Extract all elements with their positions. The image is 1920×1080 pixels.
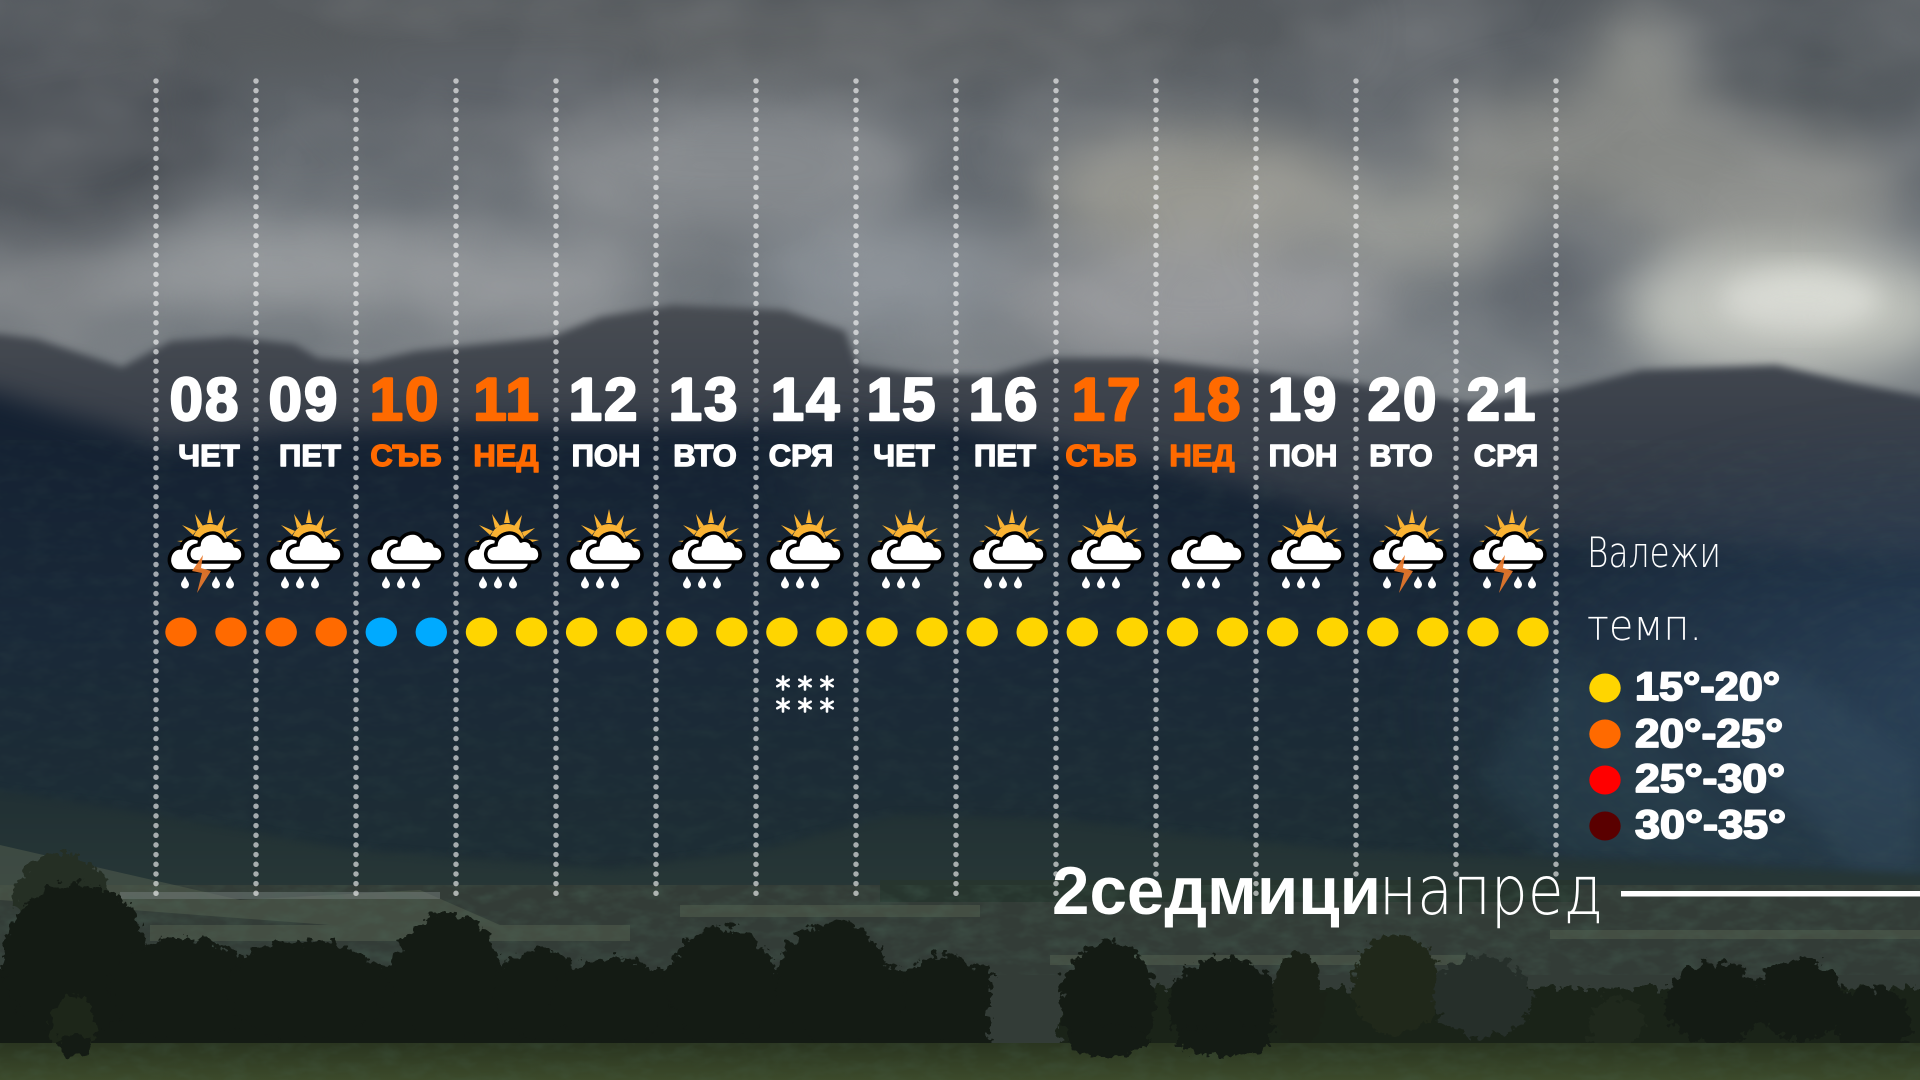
weekday: ПОН	[1269, 438, 1337, 473]
grass foreground	[0, 1043, 1920, 1080]
legend item 20-25	[1589, 712, 1783, 756]
weekday: СЪБ	[370, 438, 442, 473]
date: 18	[1172, 366, 1242, 433]
weekday: ВТО	[673, 438, 737, 473]
temperature dots	[866, 618, 948, 646]
icon: sun, clouds, rain and lightning	[169, 509, 243, 593]
date: 08	[170, 366, 240, 433]
column: 15 Thursday	[866, 366, 948, 646]
temperature dots	[165, 618, 247, 646]
weekday: ПЕТ	[279, 438, 341, 473]
column: 09 Friday	[266, 366, 347, 646]
icon: snow asterisks	[777, 676, 833, 712]
weekday: СЪБ	[1065, 438, 1137, 473]
temperature dots	[1067, 618, 1148, 646]
icon: clouds and rain	[1169, 533, 1243, 588]
date: 09	[269, 366, 339, 433]
weekday: ЧЕТ	[873, 438, 935, 473]
right side lit slope	[1000, 400, 1920, 960]
weekday: СРЯ	[769, 438, 833, 473]
dark cloud band on the ridge	[0, 305, 1920, 620]
date: 16	[969, 366, 1039, 433]
weekday: НЕД	[1169, 438, 1235, 473]
column: 12 Monday	[566, 366, 647, 646]
icon: sun, clouds, rain	[568, 509, 642, 588]
icon: sun, clouds, rain and lightning	[1371, 509, 1445, 593]
weekday: ЧЕТ	[178, 438, 240, 473]
column: 14 Wednesday	[766, 366, 848, 712]
label: precipitation: Валежи	[1587, 528, 1721, 577]
date: 21	[1467, 366, 1537, 433]
column: 08 Thursday	[165, 366, 247, 646]
temperature dots	[966, 618, 1048, 646]
title light part: напред	[1379, 852, 1603, 931]
column: 17 Saturday	[1065, 366, 1148, 646]
title bold part: 2седмици	[1052, 853, 1381, 929]
date: 19	[1268, 366, 1338, 433]
icon: sun, clouds, rain	[768, 509, 842, 588]
date: 13	[669, 366, 739, 433]
legend item 15-20: 15°-20°	[1635, 665, 1780, 709]
column: 11 Sunday	[466, 366, 547, 646]
temperature dots	[566, 618, 647, 646]
sky	[0, 0, 1920, 560]
icon: sun, clouds, rain	[268, 509, 342, 588]
legend item 25-30: 25°-30°	[1635, 757, 1785, 801]
legend item 20-25: 20°-25°	[1635, 712, 1783, 756]
temperature dots	[766, 618, 848, 646]
temperature dots	[1367, 618, 1449, 646]
title: two weeks ahead	[1052, 852, 1920, 931]
column: 10 Saturday	[366, 366, 447, 646]
temperature dots	[1267, 618, 1348, 646]
date: 11	[473, 366, 541, 433]
date: 17	[1072, 366, 1142, 433]
icon: sun, clouds, rain	[1269, 509, 1343, 588]
icon: sun, clouds, rain and lightning	[1471, 509, 1545, 593]
fields of the valley	[0, 885, 1920, 1045]
tree line	[0, 853, 1920, 1059]
date: 15	[867, 366, 937, 433]
column: 18 Sunday	[1167, 366, 1248, 646]
temperature dots	[666, 618, 748, 646]
temperature dots	[466, 618, 547, 646]
icon: clouds and rain	[369, 533, 443, 588]
legend item 25-30	[1589, 757, 1785, 801]
icon: sun, clouds, rain	[869, 509, 943, 588]
legend item 30-35: 30°-35°	[1635, 803, 1786, 847]
green foothills	[0, 780, 1920, 1050]
dark mountain	[0, 370, 1920, 940]
date: 14	[771, 366, 841, 433]
weekday: ПЕТ	[974, 438, 1036, 473]
temperature dots	[1167, 618, 1248, 646]
legend panel	[1587, 528, 1786, 847]
column: 21 Wednesday	[1467, 366, 1549, 646]
date: 10	[370, 366, 440, 433]
temperature dots	[266, 618, 347, 646]
weekday: НЕД	[473, 438, 539, 473]
date: 12	[569, 366, 639, 433]
label: temperature: темп.	[1587, 601, 1702, 650]
date: 20	[1368, 366, 1438, 433]
column: 16 Friday	[966, 366, 1048, 646]
temperature dots	[366, 618, 447, 646]
column: 20 Tuesday	[1367, 366, 1449, 646]
column: 13 Tuesday	[666, 366, 748, 646]
icon: sun, clouds, rain	[466, 509, 540, 588]
temperature dots	[1467, 618, 1549, 646]
weekday: ВТО	[1369, 438, 1433, 473]
icon: sun, clouds, rain	[1069, 509, 1143, 588]
column: 19 Monday	[1267, 366, 1348, 646]
icon: sun, clouds, rain	[670, 509, 744, 588]
weekday: СРЯ	[1474, 438, 1538, 473]
title rule	[1621, 891, 1920, 896]
legend item 30-35	[1589, 803, 1786, 847]
weekday: ПОН	[572, 438, 640, 473]
icon: sun, clouds, rain	[971, 509, 1045, 588]
